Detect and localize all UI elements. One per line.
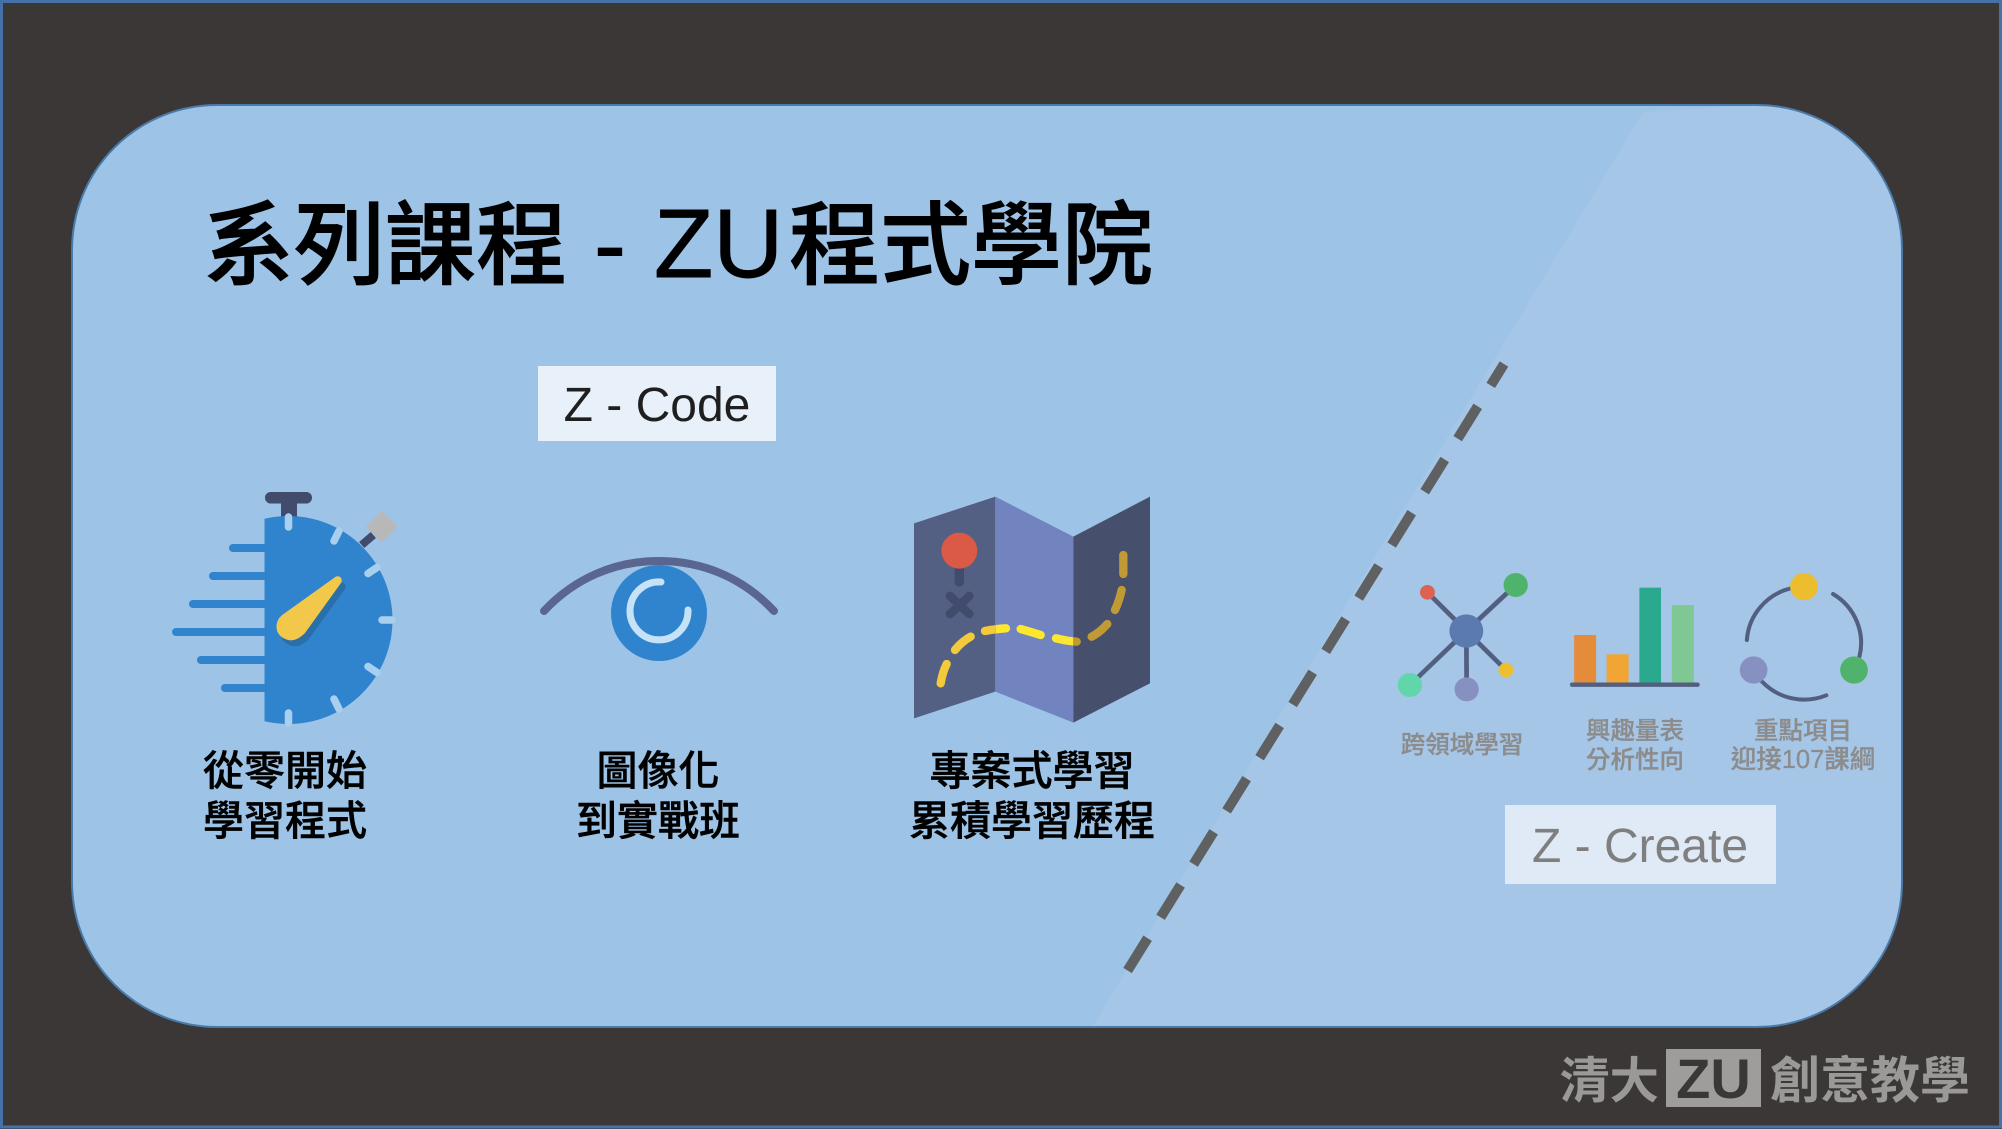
map X mark <box>950 596 969 614</box>
title: ZU <box>654 189 783 298</box>
dashed route <box>941 555 1123 683</box>
caption: bar chart: 分析性向 <box>1586 746 1684 774</box>
caption: eye: 到實戰班 <box>576 798 740 844</box>
caption: eye: 圖像化 <box>596 748 720 794</box>
dial ticks <box>288 517 392 723</box>
icon: bar chart <box>1572 588 1698 685</box>
watermark text left: 清大 <box>1560 1054 1659 1109</box>
watermark logo <box>1560 1047 1970 1110</box>
caption: bar chart: 興趣量表 <box>1586 718 1684 745</box>
title: 系列課程 <box>203 172 567 304</box>
dashed divider line <box>1126 364 1504 973</box>
label: Z - Code: Z - Code <box>564 379 750 432</box>
map pin <box>941 533 977 582</box>
caption: cycle: 迎接107課綱 <box>1731 746 1875 774</box>
caption: map: 專案式學習 <box>930 748 1134 794</box>
ZU badge: ZU <box>1676 1047 1751 1110</box>
title: 程式學院 <box>789 172 1153 304</box>
caption: map: 累積學習歷程 <box>909 798 1155 844</box>
stopwatch top button <box>265 492 312 520</box>
watermark text right: 創意教學 <box>1770 1053 1970 1109</box>
label: Z - Create <box>1505 805 1776 884</box>
speed lines <box>176 548 268 688</box>
stopwatch half dial <box>264 516 392 724</box>
icon: stopwatch <box>176 492 397 724</box>
panel: rounded blue card <box>72 105 1902 1027</box>
icon: network <box>1398 573 1528 701</box>
title: - <box>594 191 626 298</box>
icon: eye <box>544 561 774 661</box>
caption: stopwatch: 從零開始 <box>203 748 367 794</box>
icon: folded map <box>914 497 1150 723</box>
stopwatch knob <box>362 511 397 545</box>
label: Z - Code <box>538 366 776 441</box>
caption: cycle: 重點項目 <box>1754 718 1852 745</box>
icon: cycle <box>1740 573 1868 700</box>
stopwatch hand <box>277 576 346 646</box>
label: Z - Create: Z - Create <box>1532 820 1748 873</box>
caption: network: 跨領域學習 <box>1401 731 1523 759</box>
caption: stopwatch: 學習程式 <box>203 798 367 844</box>
